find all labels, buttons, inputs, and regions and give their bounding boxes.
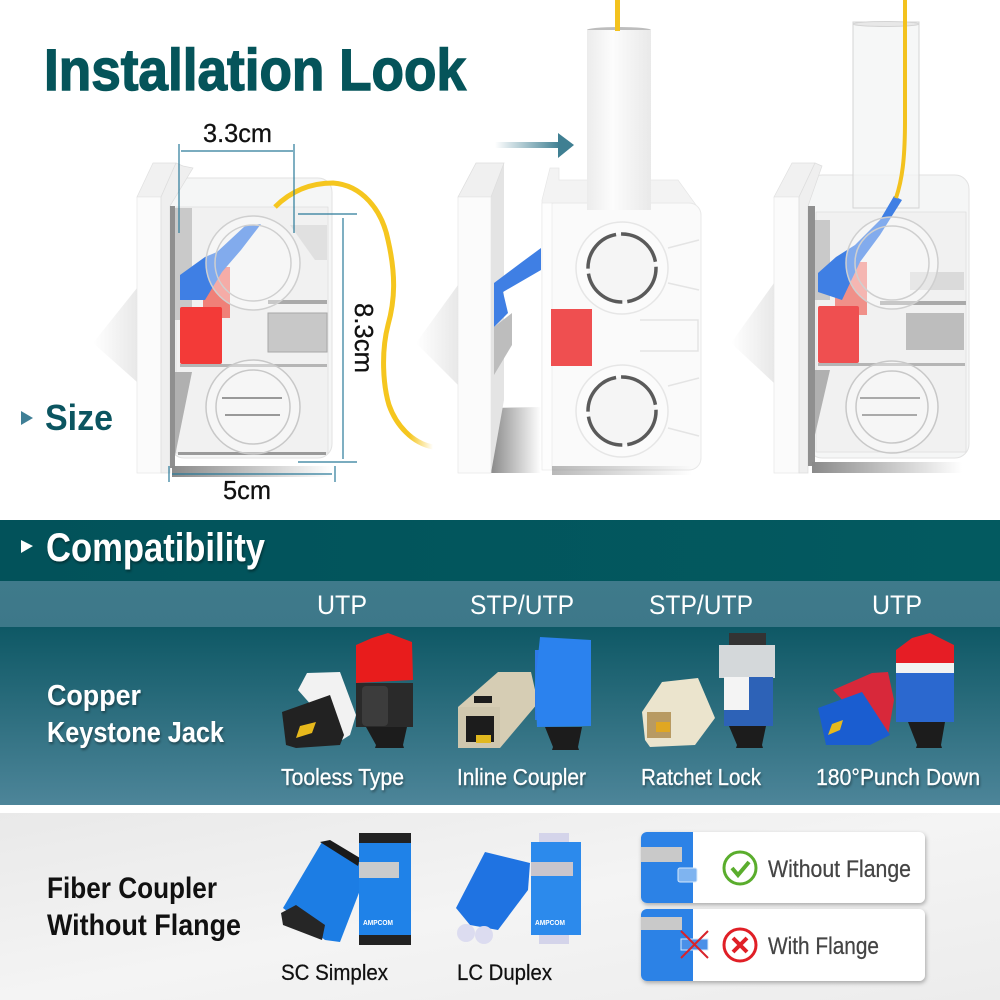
compatibility heading band: Compatibility [46, 526, 266, 570]
red latch [551, 309, 592, 366]
panel: fiber coupler [0, 813, 1000, 1000]
yellow fibre cable [275, 183, 433, 447]
knockout circle upper [576, 222, 668, 314]
labels: fiber types: SC Simplex [281, 960, 388, 985]
labels: jack types: Ratchet Lock [641, 764, 761, 790]
rear cover cone [93, 288, 137, 382]
inner plate back [491, 163, 504, 473]
face plate [137, 163, 193, 473]
title: Installation Look [44, 38, 467, 103]
knockout circle lower [576, 365, 668, 457]
header row: shielding types: UTP [317, 590, 367, 620]
knockout circle lower [846, 361, 938, 453]
knockout circle upper [206, 216, 300, 310]
arrow [495, 133, 574, 158]
heading: copper keystone jack: Copper [47, 680, 141, 712]
product: lc duplex [456, 833, 581, 944]
header row: shielding types: STP/UTP [649, 590, 753, 620]
blue connector [180, 224, 261, 300]
icon: check [724, 852, 756, 884]
labels: jack types: Tooless Type [281, 764, 404, 790]
labels: jack types [281, 764, 980, 790]
label: height: 8.3cm [349, 303, 379, 373]
icon: cross [724, 929, 756, 961]
transparent box body [808, 175, 969, 458]
product: ratchet lock [642, 633, 775, 748]
red latch [818, 306, 859, 363]
panel: transparent box with dimensions [93, 118, 433, 505]
card: without flange: Without Flange [768, 856, 911, 883]
gap shadow [491, 407, 541, 473]
header row: shielding types: STP/UTP [470, 590, 574, 620]
rear cover cone [731, 283, 774, 383]
heading: size: Size [45, 397, 113, 438]
heading: fiber coupler without flange: Without Flange [47, 909, 241, 942]
floor shadow [552, 466, 692, 475]
card: without flange [641, 832, 925, 903]
floor shadow [812, 462, 962, 473]
panel: copper keystone jack [0, 627, 1000, 805]
heading: copper keystone jack [47, 680, 225, 749]
labels: fiber types: LC Duplex [457, 960, 552, 985]
transparent box body [170, 178, 332, 458]
labels: jack types: Inline Coupler [457, 764, 586, 790]
product: punch down [818, 633, 954, 748]
label: depth: 5cm [223, 475, 271, 505]
heading: fiber coupler without flange [47, 872, 241, 942]
conduit pipe [587, 27, 651, 210]
clear conduit pipe [853, 22, 919, 208]
red latch [180, 307, 222, 364]
heading: fiber coupler without flange: Fiber Coupler [47, 872, 217, 905]
knockout circle lower [206, 360, 300, 454]
card: with flange [641, 909, 925, 981]
dimension lines [169, 144, 357, 482]
product: sc simplex [281, 833, 411, 945]
label: width: 3.3cm [203, 118, 272, 148]
product: lc duplex: AMPCOM [535, 920, 565, 927]
header row: shielding types: UTP [872, 590, 922, 620]
product: inline coupler [458, 637, 591, 750]
panel: transparent box with conduit [731, 0, 969, 473]
module latch [494, 313, 512, 375]
red latch ghost [203, 267, 230, 318]
face plate [458, 163, 504, 473]
header row: shielding types [0, 581, 1000, 627]
yellow fibre [615, 0, 620, 31]
panel: opaque box with conduit [416, 0, 701, 475]
product: sc simplex: AMPCOM [363, 920, 393, 927]
compatibility heading band [0, 520, 1000, 581]
blue connector [494, 248, 541, 327]
labels: jack types: 180°Punch Down [816, 764, 980, 790]
labels: fiber types [281, 960, 552, 985]
card: with flange: With Flange [768, 933, 879, 960]
heading: copper keystone jack: Keystone Jack [47, 717, 225, 749]
white box body [542, 168, 701, 470]
product: tooless type [282, 633, 413, 748]
blue connector [818, 196, 902, 300]
rear cover cone [416, 285, 458, 385]
red latch ghost [835, 262, 867, 315]
yellow fibre [896, 0, 905, 198]
knockout circle upper [846, 217, 938, 309]
face plate [774, 163, 822, 473]
floor shadow [172, 466, 332, 477]
